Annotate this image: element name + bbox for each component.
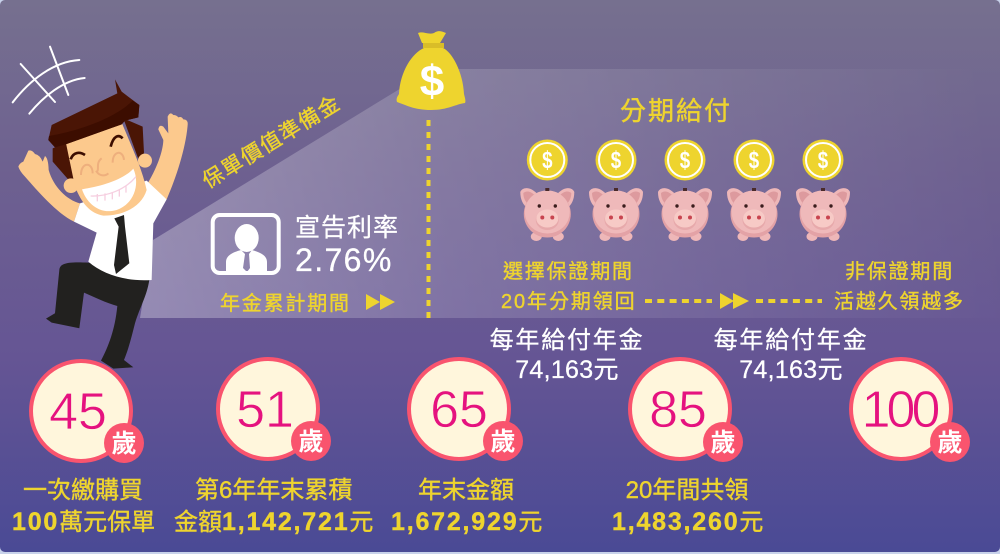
text: annual annuity first period: 每年給付年金 (490, 327, 644, 354)
text: declared rate (295, 214, 399, 278)
face (65, 118, 147, 216)
age badge 51: 51 (236, 381, 294, 439)
shirt (74, 181, 167, 280)
eyes and nose (71, 136, 123, 159)
icon: advisor portrait (213, 215, 279, 273)
text: guaranteed period: 20年分期領回 (501, 290, 637, 313)
caption: single purchase: 一次繳購買 (23, 477, 143, 504)
icon: money bag (397, 31, 465, 110)
caption: sixth year accumulated (174, 477, 373, 536)
caption: twenty year total (612, 477, 763, 536)
back hair (53, 118, 144, 185)
age badge 100 (851, 359, 970, 462)
age badge 65: 歲 (490, 428, 516, 456)
label: accumulation period with arrow: 年金累計期間 (220, 292, 351, 315)
caption: single purchase: 100萬元保單 (12, 508, 155, 536)
spark lines (13, 47, 85, 114)
age badge 85: 歲 (710, 429, 736, 457)
dotted divider line (426, 120, 430, 318)
text: declared rate: 2.76% (295, 242, 393, 278)
icons: piggy banks (520, 188, 850, 241)
arrow: dashed timeline (645, 293, 822, 309)
text: annual annuity first period (490, 327, 644, 384)
caption: year end amount: 1,672,929元 (391, 508, 542, 536)
text: non-guaranteed period: 活越久領越多 (834, 290, 965, 313)
caption: sixth year accumulated: 第6年年末累積 (195, 477, 352, 504)
caption: single purchase (12, 477, 155, 536)
icons: coins (527, 140, 844, 180)
text: annual annuity first period: 74,163元 (515, 356, 619, 384)
caption: twenty year total: 20年間共領 (626, 477, 748, 504)
icon: money bag: $ (420, 57, 444, 106)
age badge 51: 歲 (298, 428, 324, 456)
caption: year end amount: 年末金額 (418, 477, 514, 504)
text: annual annuity second period: 74,163元 (739, 356, 843, 384)
age badge 45: 45 (49, 383, 107, 441)
age badge 100: 歲 (937, 429, 963, 457)
age badge 85: 85 (649, 381, 707, 439)
age badge 45: 歲 (111, 430, 137, 458)
age badge 45 (31, 361, 144, 463)
text: declared rate: 宣告利率 (295, 214, 399, 242)
pants (46, 262, 149, 369)
text: non-guaranteed period (834, 260, 965, 313)
smile (82, 169, 136, 211)
text: annual annuity second period (714, 327, 868, 384)
hair (48, 79, 139, 147)
caption: sixth year accumulated: 金額1,142,721元 (174, 508, 373, 536)
ears (138, 154, 152, 168)
panel: light beam accumulating value (140, 69, 1000, 318)
age badge 100: 100 (862, 381, 938, 439)
age badge 85 (630, 359, 743, 462)
right arm (147, 113, 188, 199)
tie (114, 215, 129, 274)
age badge 65: 65 (430, 381, 488, 439)
text: guaranteed period (501, 260, 637, 313)
heading: installment payment: 分期給付 (620, 96, 732, 126)
left arm (18, 150, 80, 222)
text: guaranteed period: 選擇保證期間 (503, 260, 634, 283)
text: non-guaranteed period: 非保證期間 (845, 260, 954, 283)
text: annual annuity second period: 每年給付年金 (714, 327, 868, 354)
caption: twenty year total: 1,483,260元 (612, 508, 763, 536)
caption: year end amount (391, 477, 542, 536)
age badge 65 (409, 359, 523, 461)
age badge 51 (218, 359, 331, 461)
heading: policy value reserve: 保單價值準備金 (199, 91, 345, 193)
illustration: cheering businessman (13, 47, 188, 369)
